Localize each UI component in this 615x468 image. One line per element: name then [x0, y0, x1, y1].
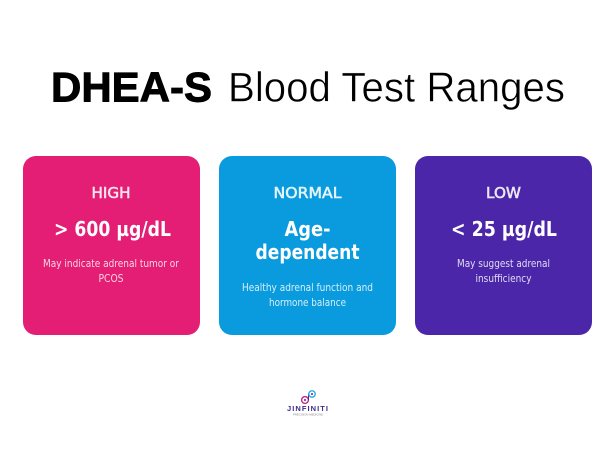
high label: HIGH — [92, 184, 130, 202]
normal value — [256, 217, 360, 264]
normal value: Age- — [284, 217, 330, 241]
icon: logo mark — [302, 391, 315, 403]
normal description: Healthy adrenal function and — [242, 282, 373, 294]
panel: low — [415, 156, 592, 335]
normal value: dependent — [256, 240, 360, 264]
normal description — [242, 282, 373, 309]
logo: Jinfiniti — [287, 391, 328, 416]
normal label: NORMAL — [274, 184, 342, 202]
panel: high — [23, 156, 200, 335]
logo tagline: PRECISION MEDICINE — [293, 412, 323, 416]
normal description: hormone balance — [269, 297, 346, 309]
panel: normal — [219, 156, 396, 335]
high description — [43, 258, 180, 285]
low description — [457, 258, 550, 285]
title: Blood Test Ranges — [228, 64, 565, 110]
title: DHEA-S — [51, 64, 212, 110]
high description: PCOS — [98, 273, 124, 285]
low label: LOW — [486, 184, 521, 202]
low value: < 25 µg/dL — [451, 217, 557, 241]
low description: May suggest adrenal — [457, 258, 550, 270]
high value: > 600 µg/dL — [54, 217, 171, 241]
low description: insufficiency — [476, 273, 532, 285]
logo wordmark: JINFINITI — [287, 404, 328, 413]
title — [51, 64, 565, 110]
high description: May indicate adrenal tumor or — [43, 258, 180, 270]
